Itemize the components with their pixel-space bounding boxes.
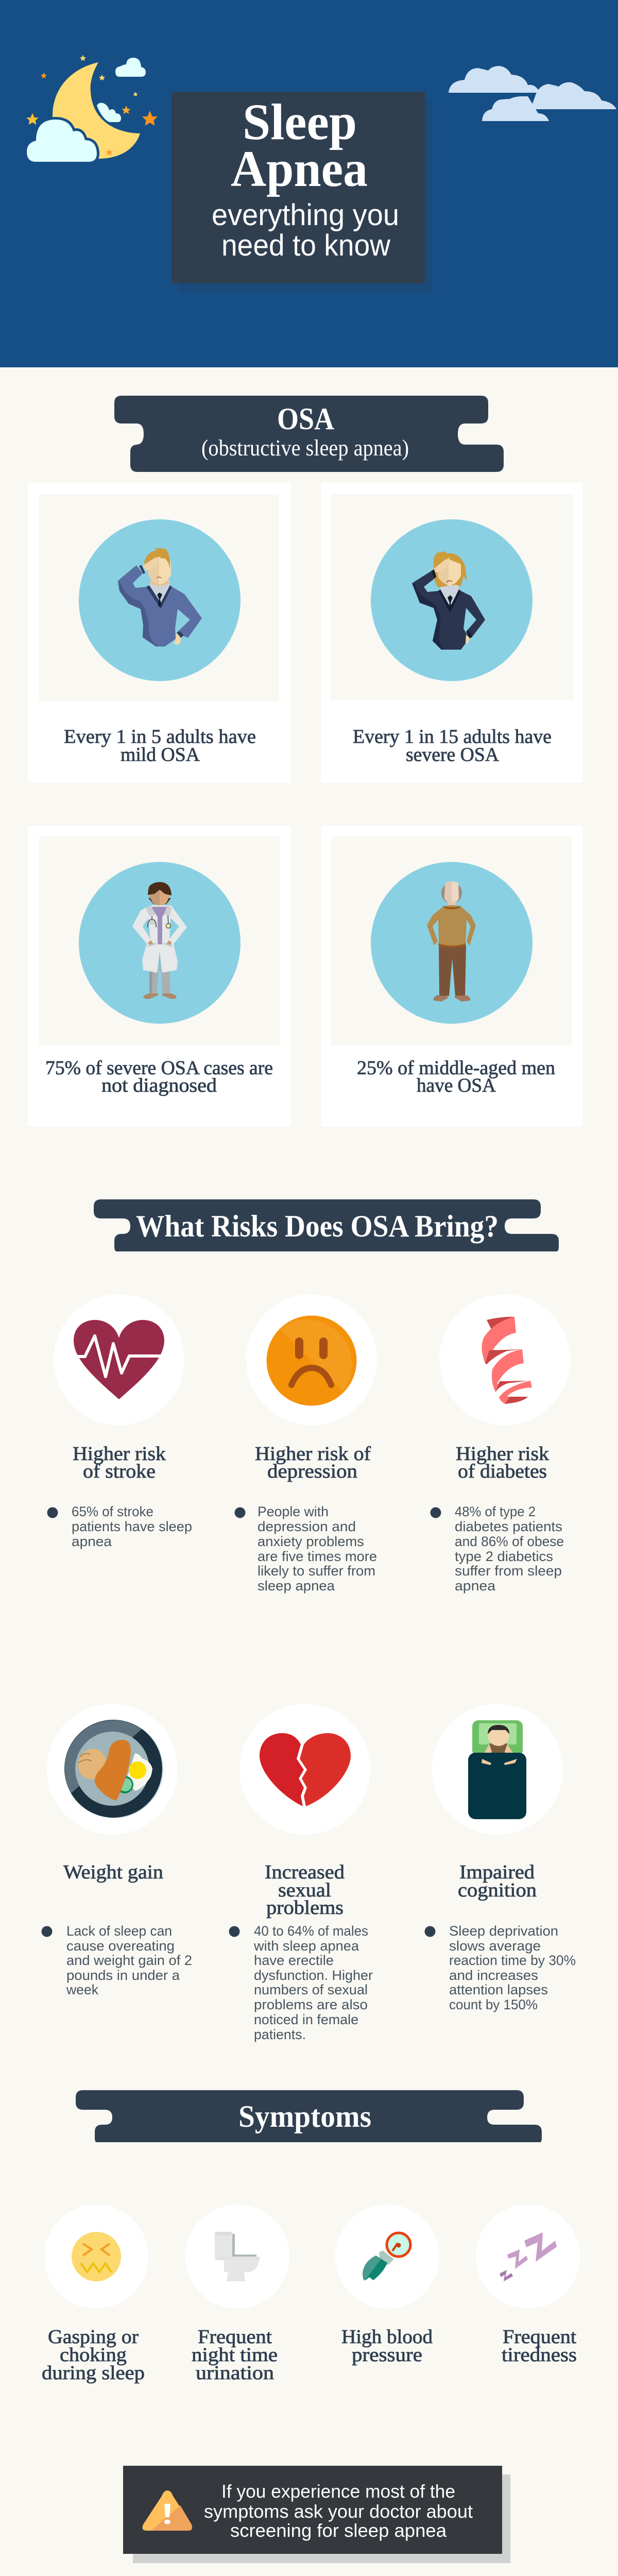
subtitle: everything you (212, 198, 399, 232)
label: Gasping or (48, 2326, 139, 2348)
callout text: If you experience most of the (221, 2481, 455, 2502)
bullet text: noticed in female (254, 2012, 358, 2027)
bullet text: apnea (455, 1578, 496, 1594)
bullet text: likely to suffer from (258, 1563, 375, 1579)
stat text: not diagnosed (101, 1075, 217, 1096)
heading: sexual (278, 1879, 331, 1901)
bullet text (424, 1923, 576, 2012)
bullet text: apnea (72, 1534, 112, 1549)
heading: What Risks Does OSA Bring? (94, 1199, 559, 1251)
heading: Weight gain (63, 1861, 163, 1883)
bullet text: and weight gain of 2 (66, 1953, 192, 1968)
stat text: Every 1 in 15 adults have (353, 726, 552, 748)
label: High blood (341, 2326, 433, 2348)
bullet text (235, 1504, 377, 1594)
bullet text: count by 150% (449, 1997, 538, 2012)
label: Frequent (503, 2326, 576, 2348)
stat text: severe OSA (406, 744, 500, 766)
bullet text: have erectile (254, 1953, 334, 1968)
heading (458, 1861, 537, 1901)
icon: man with hand on forehead (118, 548, 202, 647)
bullet text: Sleep deprivation (449, 1923, 558, 1939)
icon: plate of food (64, 1720, 163, 1818)
title: Apnea (231, 140, 368, 197)
icon: man sleeping in bed (468, 1720, 526, 1819)
label: during sleep (42, 2362, 145, 2384)
heading: OSA: (obstructive sleep apnea) (201, 435, 409, 461)
symptom: night time urination (185, 2205, 289, 2384)
icon: zzz sleep letters (500, 2232, 557, 2281)
risk: sexual problems (229, 1704, 373, 2042)
panel: middle-aged men card (321, 826, 582, 1126)
heading (265, 1861, 345, 1919)
bullet text: week (66, 1982, 98, 1997)
icon: ribbon (482, 1317, 532, 1404)
heading: of diabetes (458, 1461, 547, 1482)
icon: clouds at right (449, 66, 616, 121)
heading: OSA: OSA (277, 402, 334, 436)
bullet text (41, 1923, 192, 1997)
label: night time (192, 2344, 278, 2366)
symptom: gasping or choking (42, 2205, 148, 2384)
bullet text: diabetes patients (455, 1519, 562, 1534)
bullet text: People with (258, 1504, 329, 1519)
heading: Higher risk (456, 1443, 549, 1465)
heading: problems (266, 1897, 344, 1919)
risk: weight gain (41, 1704, 192, 1997)
icon: heart with pulse line (74, 1320, 164, 1399)
title: Sleep (243, 93, 357, 150)
heading (255, 1443, 371, 1482)
bullet text: numbers of sexual (254, 1982, 368, 1997)
bullet text: reaction time by 30% (449, 1953, 576, 1968)
label (502, 2326, 577, 2366)
heading: What Risks Does OSA Bring?: What Risks Does OSA Bring? (136, 1209, 499, 1243)
bullet text: are five times more (258, 1549, 377, 1564)
bullet text: with sleep apnea (253, 1938, 359, 1954)
callout text: symptoms ask your doctor about (204, 2501, 473, 2522)
bullet text: dysfunction. Higher (254, 1968, 373, 1983)
heading: Increased (265, 1861, 345, 1883)
heading: Higher risk of (255, 1443, 371, 1465)
icon: choking face (72, 2232, 121, 2281)
bullet text: and increases (449, 1968, 538, 1983)
bullet text: patients have sleep (72, 1519, 192, 1534)
title (231, 93, 368, 197)
bullet text: and 86% of obese (455, 1534, 564, 1549)
stat text (64, 726, 256, 766)
title box (171, 92, 433, 293)
panel: mild OSA card (28, 483, 291, 783)
heading: OSA (114, 396, 504, 472)
panel: hero header (0, 0, 618, 367)
label: urination (196, 2362, 274, 2384)
risk: diabetes (431, 1294, 570, 1594)
heading (456, 1443, 549, 1482)
callout text: screening for sleep apnea (230, 2520, 447, 2541)
bullet text (229, 1923, 373, 2042)
risk: depression (235, 1294, 377, 1594)
bullet text: anxiety problems (258, 1534, 364, 1549)
bullet text (47, 1504, 192, 1549)
stat text (45, 1057, 273, 1096)
heading: Impaired (459, 1861, 535, 1883)
stat text: have OSA (417, 1075, 496, 1096)
label: Frequent (198, 2326, 272, 2348)
bullet text: cause overeating (66, 1938, 175, 1954)
heading: Symptoms (76, 2090, 542, 2142)
bullet text: slows average (449, 1938, 541, 1954)
symptom: frequent tiredness (476, 2205, 580, 2366)
symptom: high blood pressure (335, 2205, 439, 2366)
label (42, 2326, 145, 2384)
label (192, 2326, 278, 2384)
bullet text: Lack of sleep can (66, 1923, 172, 1939)
bullet text: 65% of stroke (72, 1504, 153, 1519)
bullet text: type 2 diabetics (455, 1549, 553, 1564)
icon: doctor (132, 882, 187, 999)
icon: broken heart (260, 1733, 351, 1806)
stat text: 25% of middle-aged men (357, 1057, 555, 1079)
heading (73, 1443, 166, 1482)
heading: depression (267, 1461, 357, 1482)
bullet text: depression and (258, 1519, 356, 1534)
subtitle: need to know (221, 229, 391, 262)
icon: moon with stars and clouds (26, 55, 158, 162)
heading: cognition (458, 1879, 537, 1901)
icon: blood pressure gauge (363, 2233, 410, 2281)
risk: stroke (47, 1294, 192, 1549)
stat text (357, 1057, 555, 1096)
heading: Symptoms: Symptoms (238, 2099, 371, 2133)
bullet text: sleep apnea (258, 1578, 335, 1594)
icon: warning triangle (143, 2490, 192, 2531)
stat text: 75% of severe OSA cases are (45, 1057, 273, 1079)
label: choking (60, 2344, 127, 2366)
callout text (204, 2481, 473, 2541)
bullet text: problems are also (254, 1997, 368, 2012)
label (341, 2326, 433, 2366)
subtitle (212, 198, 399, 262)
label: pressure (352, 2344, 422, 2366)
bullet text: 40 to 64% of males (254, 1923, 368, 1939)
icon: older man (427, 882, 476, 1002)
stat text: mild OSA (121, 744, 200, 766)
bullet text: suffer from sleep (455, 1563, 562, 1579)
callout: ask your doctor (123, 2466, 510, 2563)
stat text: Every 1 in 5 adults have (64, 726, 256, 748)
heading: Higher risk (73, 1443, 166, 1465)
bullet text: patients. (254, 2027, 306, 2042)
bullet text: pounds in under a (66, 1968, 180, 1983)
risk: impaired cognition (424, 1704, 576, 2012)
icon: woman with hand on forehead (412, 551, 485, 650)
heading: of stroke (83, 1461, 156, 1482)
bullet text: attention lapses (449, 1982, 548, 1997)
icon: toilet (215, 2232, 260, 2281)
panel: undiagnosed card (28, 826, 291, 1126)
bullet text: 48% of type 2 (455, 1504, 536, 1519)
stat text (353, 726, 552, 766)
panel: severe OSA card (321, 483, 582, 783)
icon: sad face (267, 1316, 356, 1405)
bullet text (431, 1504, 564, 1594)
label: tiredness (502, 2344, 577, 2366)
